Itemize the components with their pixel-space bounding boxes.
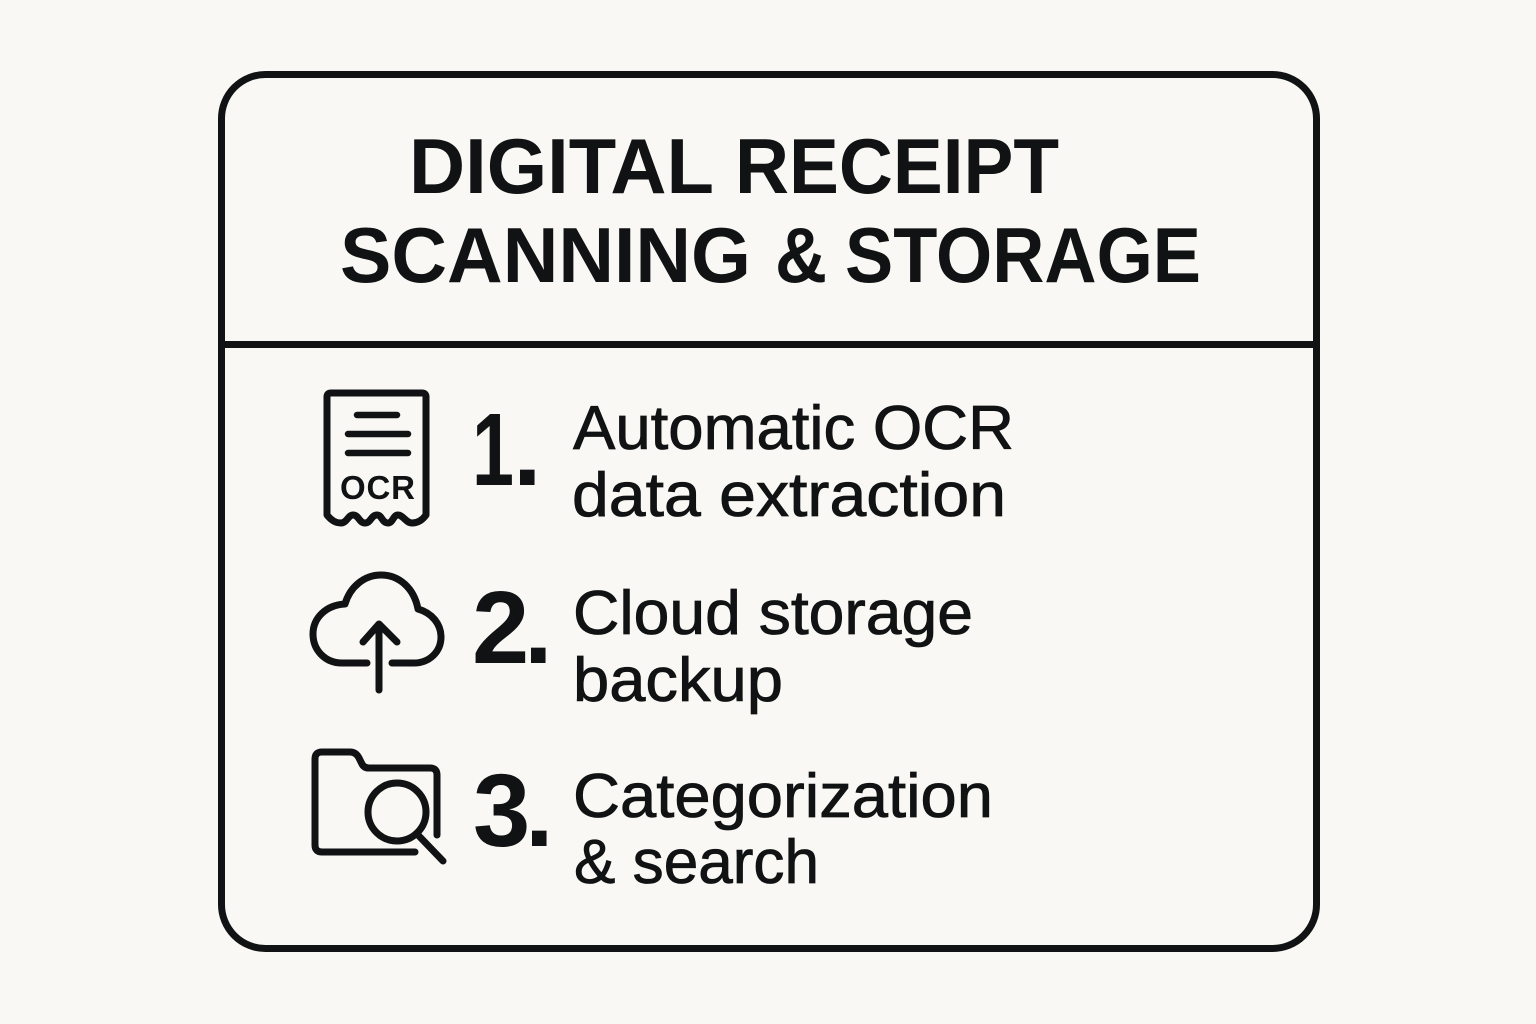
- title: RECEIPT: [735, 122, 1059, 210]
- number 2: .: [524, 570, 553, 685]
- panel: main frame: [222, 74, 1316, 948]
- text: categorization and search: & search: [574, 828, 819, 897]
- text: automatic OCR data extraction: Automatic OCR: [573, 394, 1014, 463]
- text: automatic OCR data extraction: data extraction: [572, 461, 1006, 530]
- title: SCANNING: [340, 211, 751, 299]
- list item 2: [313, 570, 973, 715]
- text: cloud storage backup: [573, 579, 973, 715]
- text: cloud storage backup: Cloud storage: [573, 579, 973, 648]
- list item 3: [315, 752, 993, 897]
- icon: OCR receipt: OCR: [340, 469, 415, 506]
- text: categorization and search: Categorization: [573, 762, 993, 831]
- number 3: .: [525, 753, 554, 868]
- text: cloud storage backup: backup: [573, 646, 783, 715]
- number 2: 2: [472, 570, 529, 685]
- text: categorization and search: [573, 762, 993, 897]
- title: [340, 122, 1201, 299]
- title: DIGITAL: [409, 122, 714, 210]
- number 1: 1: [472, 392, 514, 507]
- icon: folder search: [315, 752, 443, 861]
- text: automatic OCR data extraction: [572, 394, 1014, 530]
- title: STORAGE: [845, 211, 1201, 299]
- list item 1: [327, 392, 1014, 530]
- icon: cloud upload: [313, 575, 441, 690]
- number 3: 3: [473, 753, 530, 868]
- title: &: [775, 211, 827, 299]
- icon: OCR receipt: [327, 393, 426, 523]
- number 1: .: [513, 392, 542, 507]
